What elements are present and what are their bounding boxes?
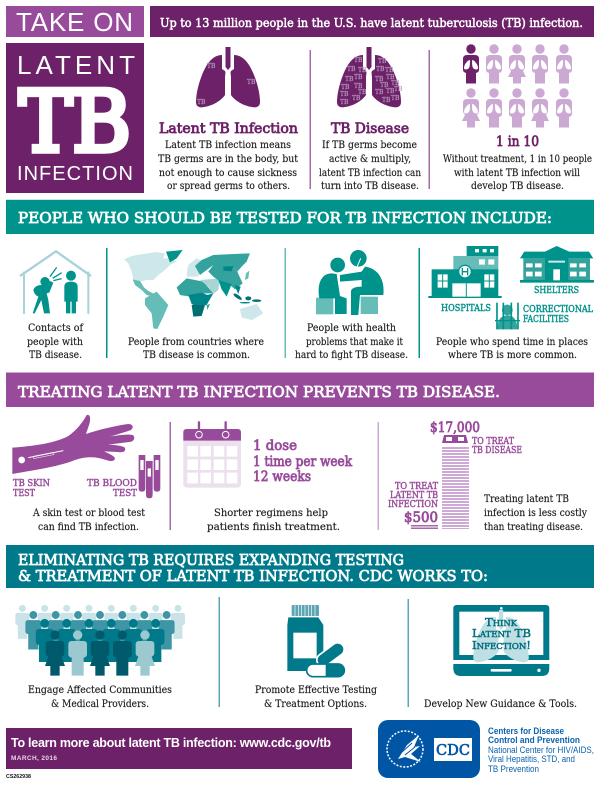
text: contacts caption: people with xyxy=(27,336,83,348)
panel: latent TB infection xyxy=(158,47,299,192)
text: places caption xyxy=(436,336,588,361)
icon: lungs full of TB germs: TB xyxy=(340,99,349,106)
text: cost caption xyxy=(484,493,587,533)
label: shelters: SHELTERS xyxy=(534,285,579,296)
label: to treat TB disease xyxy=(472,436,522,456)
text: communities caption: Engage Affected Communities xyxy=(28,684,172,696)
text: 1 in 10 description: develop TB disease. xyxy=(471,180,564,192)
text: health problems caption: problems that make it xyxy=(306,336,404,348)
logo: HHS and CDC xyxy=(378,720,480,778)
label: to treat latent TB infection xyxy=(388,481,439,510)
text: countries caption xyxy=(128,336,264,361)
text: publication code: CS262938 xyxy=(6,774,31,780)
text: latent TB description: TB germs are in the body, but xyxy=(158,153,299,165)
text: CDC organization name xyxy=(488,726,594,774)
text: places caption: where TB is more common. xyxy=(448,349,577,361)
icon: lungs full of TB germs: TB xyxy=(347,66,356,73)
logo: HHS and CDC: CDC xyxy=(436,741,470,759)
text: cost caption: Treating latent TB xyxy=(484,493,569,505)
panel: testing and treatment options xyxy=(255,605,377,710)
text: cost caption: infection is less costly xyxy=(484,507,587,519)
icon: lungs with few TB germs: TB xyxy=(207,63,216,70)
icon: correctional facility bars xyxy=(495,303,520,329)
icon: lungs full of TB germs: TB xyxy=(376,66,385,73)
banner: take on: TAKE ON xyxy=(16,7,133,37)
icon: lungs full of TB germs: TB xyxy=(386,74,395,81)
text: dosing schedule: 1 time per week xyxy=(253,454,353,470)
icon: lungs full of TB germs: TB xyxy=(382,97,391,104)
text: tests caption: A skin test or blood test xyxy=(32,507,146,519)
label: correctional facilities: FACILITIES xyxy=(523,314,569,325)
icon: arm with syringe xyxy=(12,415,134,474)
text: dosing schedule: 1 dose xyxy=(253,438,297,454)
icon: lungs with few TB germs: TB xyxy=(247,79,256,86)
text: testing caption: & Treatment Options. xyxy=(264,698,367,710)
icon: lungs full of TB germs: TB xyxy=(341,84,350,91)
label: to treat TB disease: TB DISEASE xyxy=(472,445,522,456)
icon: lungs full of TB germs: TB xyxy=(386,88,395,95)
text: regimens caption: Shorter regimens help xyxy=(214,507,328,519)
text: 1 in 10 description: with latent TB infection will xyxy=(454,167,581,179)
title: latent TB infection xyxy=(6,43,144,193)
heading bar: people who should be tested: PEOPLE WHO SHOULD BE TESTED FOR TB INFECTION INCLUDE: xyxy=(18,209,552,227)
text: TB disease description: latent TB infection can xyxy=(319,167,421,179)
panel: engage communities xyxy=(15,605,185,710)
text: TB disease description: If TB germs become xyxy=(322,139,417,151)
heading bar: treating latent TB xyxy=(6,372,594,407)
icon: lungs with few TB germs xyxy=(196,47,260,107)
chart: $500 money stack: $500 xyxy=(404,510,438,526)
text: TB disease description xyxy=(319,139,421,192)
text: TB disease description: turn into TB disease. xyxy=(321,180,419,192)
text: tests caption: can find TB infection. xyxy=(38,521,139,533)
footer banner: learn more: MARCH, 2016 xyxy=(11,755,57,762)
icon: lungs full of TB germs: TB xyxy=(358,89,367,96)
panel: treatment cost comparison xyxy=(388,420,587,533)
heading bar: people who should be tested xyxy=(6,200,594,234)
icon: lungs full of TB germs: TB xyxy=(358,67,367,74)
label: to treat latent TB infection: INFECTION xyxy=(388,499,438,510)
icon: ten people, one highlighted xyxy=(462,44,572,127)
text: CDC organization name: Control and Prevention xyxy=(488,735,580,745)
text: guidance caption: Develop New Guidance & Tools. xyxy=(424,698,577,710)
icon: laptop with message: Infection! xyxy=(472,639,531,652)
icon: lungs full of TB germs: TB xyxy=(394,86,403,93)
panel: people from countries where TB is common xyxy=(124,250,264,361)
icon: house with coughing person xyxy=(20,251,91,314)
text: 1 in 10 description xyxy=(443,153,592,192)
title: latent TB infection: INFECTION xyxy=(17,163,133,185)
icon: lungs full of TB germs: TB xyxy=(352,95,361,102)
heading bar: eliminating TB: & TREATMENT OF LATENT TB INFECTION. CDC WORKS TO: xyxy=(18,567,488,585)
icon: lungs full of TB germs: TB xyxy=(375,76,384,83)
icon: lungs full of TB germs: TB xyxy=(391,80,400,87)
text: cost caption: than treating disease. xyxy=(484,521,583,533)
text: contacts caption xyxy=(27,322,84,361)
chart: $17,000 money stack: $17,000 xyxy=(430,420,480,436)
text: latent TB description xyxy=(158,139,299,192)
text: tests caption xyxy=(32,507,146,533)
text: regimens caption: patients finish treatment. xyxy=(207,521,340,533)
icon: calendar xyxy=(183,422,241,488)
icon: blood test tubes xyxy=(139,455,160,498)
icon: lungs full of TB germs: TB xyxy=(380,82,389,89)
label: TB blood test xyxy=(87,478,138,499)
icon: lungs full of TB germs: TB xyxy=(378,58,387,65)
text: TB disease description: active & multiply, xyxy=(329,153,411,165)
panel: shorter regimens xyxy=(183,422,353,533)
icon: lungs full of TB germs: TB xyxy=(385,67,394,74)
text: health problems caption: People with health xyxy=(307,322,396,334)
label: TB skin test xyxy=(13,478,50,499)
panel: skin and blood tests xyxy=(12,415,160,533)
icon: lungs full of TB germs: TB xyxy=(375,89,384,96)
text: health problems caption: hard to fight TB disease. xyxy=(295,349,408,361)
label: to treat latent TB infection: TO TREAT xyxy=(395,481,439,492)
text: dosing schedule xyxy=(253,438,353,485)
panel: TB disease xyxy=(319,47,421,192)
label: correctional facilities xyxy=(523,304,594,325)
icon: lungs full of TB germs: TB xyxy=(391,95,400,102)
text: dosing schedule: 12 weeks xyxy=(253,469,311,485)
text: contacts caption: Contacts of xyxy=(28,322,84,334)
icon: laptop with message: Think xyxy=(485,616,518,629)
label: TB blood test: TEST xyxy=(113,488,138,499)
panel: 1 in 10 xyxy=(443,44,592,192)
panel: title block xyxy=(6,6,144,193)
text: health problems caption xyxy=(295,322,408,361)
banner: 13 million people statistic xyxy=(150,6,594,37)
panel: guidance and tools xyxy=(424,605,577,710)
text: latent TB description: or spread germs to others. xyxy=(167,180,290,192)
title: latent TB infection: LATENT xyxy=(17,50,135,80)
icon: lungs full of TB germs: TB xyxy=(354,74,363,81)
label: to treat latent TB infection: LATENT TB xyxy=(390,490,438,501)
footer banner: learn more: To learn more about latent TB infection: www.cdc.gov/tb xyxy=(11,736,331,750)
text: regimens caption xyxy=(207,507,340,533)
text: contacts caption: TB disease. xyxy=(29,349,82,361)
text: CDC organization name: TB Prevention xyxy=(488,764,539,774)
icon: hospital xyxy=(428,246,502,298)
text: communities caption: & Medical Providers. xyxy=(51,698,149,710)
icon: crowd of people xyxy=(15,605,185,676)
panel: contacts of people with TB xyxy=(20,251,91,361)
icon: lungs full of TB germs: TB xyxy=(345,76,354,83)
icon: laptop with message xyxy=(453,605,549,676)
heading bar: eliminating TB xyxy=(6,545,594,588)
map: world TB burden xyxy=(124,250,263,329)
footer banner: learn more xyxy=(6,728,352,769)
text: testing caption: Promote Effective Testing xyxy=(255,684,377,696)
heading bar: eliminating TB: ELIMINATING TB REQUIRES EXPANDING TESTING xyxy=(18,551,404,569)
heading: 1 in 10: 1 in 10 xyxy=(496,134,539,150)
label: TB skin test: TEST xyxy=(13,488,36,499)
label: hospitals: HOSPITALS xyxy=(441,303,491,314)
text: testing caption xyxy=(255,684,377,710)
heading: latent TB infection: Latent TB Infection xyxy=(159,121,298,137)
text: latent TB description: not enough to cause sickness xyxy=(159,167,297,179)
label: TB skin test: TB SKIN xyxy=(13,478,50,489)
text: CDC organization name: Viral Hepatitis, STD, and xyxy=(488,754,575,764)
panel: high-risk places xyxy=(428,246,594,361)
chart: $17,000 money stack xyxy=(430,420,480,529)
text: latent TB description: Latent TB infection means xyxy=(165,139,291,151)
title: latent TB infection: TB xyxy=(19,73,131,171)
heading: TB disease: TB Disease xyxy=(331,121,409,137)
label: TB blood test: TB BLOOD xyxy=(87,478,137,489)
panel: people with health problems xyxy=(295,250,408,361)
icon: lungs with few TB germs: TB xyxy=(197,99,206,106)
label: to treat TB disease: TO TREAT xyxy=(472,436,515,447)
icon: lungs full of TB germs: TB xyxy=(340,91,349,98)
text: CDC organization name: Centers for Disease xyxy=(488,726,564,736)
icon: lungs full of TB germs xyxy=(337,47,403,107)
icon: laptop with message: Latent TB xyxy=(472,627,531,640)
text: countries caption: People from countries where xyxy=(128,336,264,348)
text: communities caption xyxy=(28,684,172,710)
text: countries caption: TB disease is common. xyxy=(143,349,250,361)
icon: shelter xyxy=(520,246,594,283)
icon: lungs full of TB germs: TB xyxy=(354,83,363,90)
icon: lungs full of TB germs: TB xyxy=(354,57,363,64)
icon: doctor examining patient xyxy=(316,250,384,315)
icon: pill bottle and capsules xyxy=(287,605,344,677)
heading bar: treating latent TB: TREATING LATENT TB INFECTION PREVENTS TB DISEASE. xyxy=(18,383,500,401)
